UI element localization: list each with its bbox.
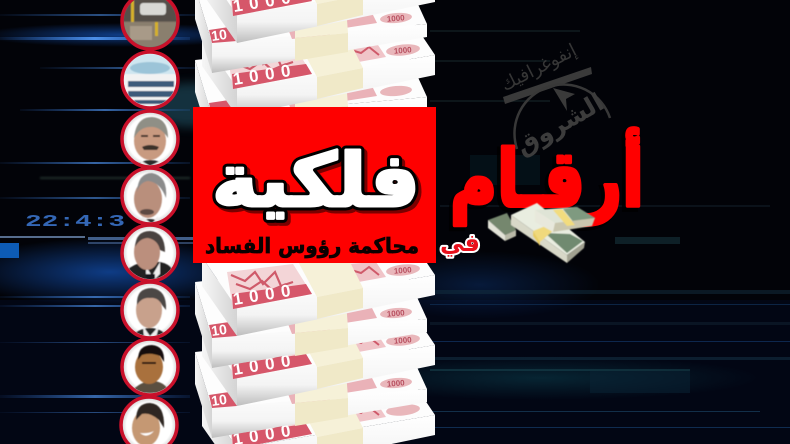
bundle: 1000 <box>394 45 413 56</box>
portrait: man 5 <box>122 339 178 395</box>
headline: numbers: أرقـام <box>450 128 644 225</box>
photo: factory <box>120 0 180 49</box>
money stack <box>195 0 435 444</box>
bundle <box>195 38 427 146</box>
bundle: 10 <box>210 391 228 409</box>
bundle <box>195 330 427 438</box>
bundle: 1000 <box>232 281 292 309</box>
bundle: 10 <box>210 26 228 44</box>
bundle: 1000 <box>387 378 406 389</box>
bundle: 1000 <box>387 308 406 319</box>
bundle: 1000 <box>232 351 292 379</box>
bundle: 1000 <box>394 265 413 276</box>
watermark caption: إنفوغرافيك <box>498 40 580 96</box>
headline word: فلكية <box>215 141 423 227</box>
bundle <box>202 293 435 406</box>
top bundle <box>535 207 595 232</box>
portrait: man 1 <box>122 111 178 170</box>
long bundle <box>511 203 585 263</box>
red title panel <box>193 107 436 263</box>
photo: building <box>122 52 178 108</box>
bundle <box>202 3 435 116</box>
small bundle left <box>488 213 516 241</box>
bundle: 1000 <box>232 61 292 89</box>
red title panel: فلكية <box>212 138 420 224</box>
portrait: man 2 <box>122 168 178 226</box>
bundle <box>202 223 435 336</box>
bundle <box>202 0 435 43</box>
portrait: man 6 <box>121 397 177 444</box>
subtitle: محاكمة رؤوس الفساد <box>205 234 419 258</box>
portrait column <box>120 0 180 444</box>
bundle: 1000 <box>387 13 406 24</box>
watermark logo <box>498 40 610 162</box>
portrait: man 4 <box>122 282 178 338</box>
bundle <box>195 260 427 368</box>
portrait: man 3 <box>122 225 178 284</box>
clock digits: 22:4:3 <box>25 213 125 232</box>
bundle <box>202 363 435 444</box>
red title panel: فلكية <box>212 138 420 224</box>
bundle: 1000 <box>394 335 413 346</box>
word: in: في <box>440 229 480 257</box>
headline: numbers: أرقـام <box>447 131 641 228</box>
bundle: 10 <box>210 321 228 339</box>
watermark brand: الشروق <box>511 87 609 162</box>
icon: cash bundles <box>488 203 595 263</box>
bundle <box>195 0 427 73</box>
